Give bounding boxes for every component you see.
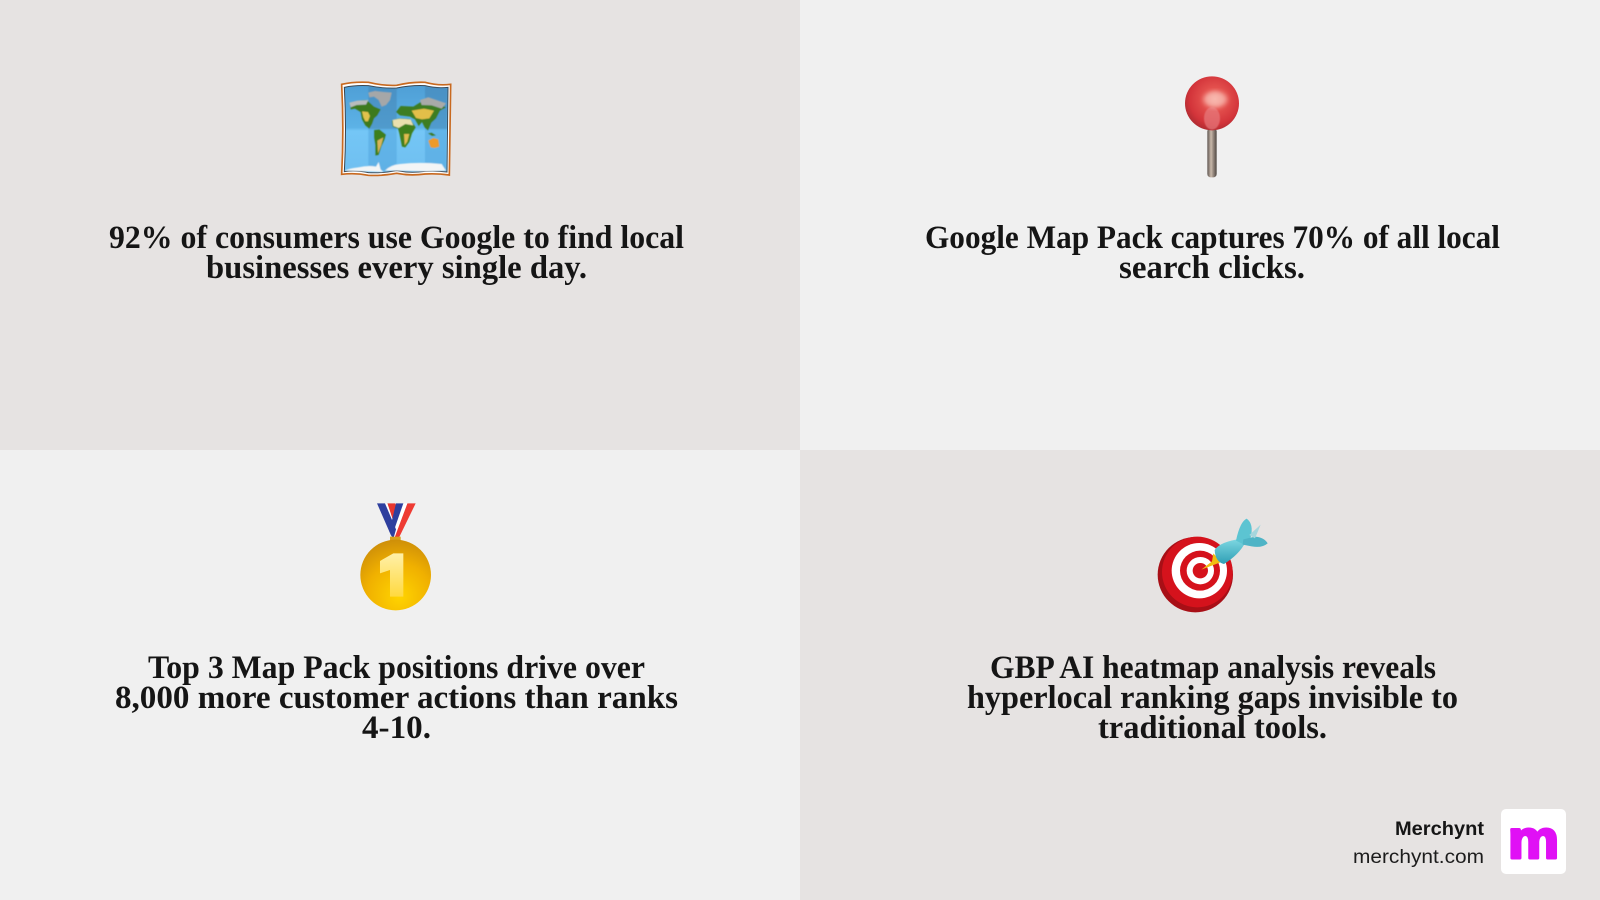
logo xyxy=(1501,809,1566,874)
heading: stat 3 xyxy=(115,650,678,746)
logo: m xyxy=(1508,810,1559,870)
heading: stat 1: 92% of consumers use Google to find local xyxy=(109,220,684,256)
heading: stat 2 xyxy=(925,220,1500,286)
icon: red map pin xyxy=(1185,76,1239,177)
panel: top right xyxy=(800,0,1600,450)
heading: stat 3: 8,000 more customer actions than ranks xyxy=(115,680,678,716)
panel: bottom left xyxy=(0,450,800,900)
heading: stat 2: Google Map Pack captures 70% of all local xyxy=(925,220,1500,256)
icon: gold medal xyxy=(360,503,431,610)
heading: stat 1 xyxy=(109,220,684,286)
heading: stat 3: Top 3 Map Pack positions drive over xyxy=(148,650,645,686)
heading: stat 3: 4-10. xyxy=(362,710,431,746)
panel: top left xyxy=(0,0,800,450)
heading: stat 4: GBP AI heatmap analysis reveals xyxy=(990,650,1436,686)
heading: stat 4: traditional tools. xyxy=(1098,710,1327,746)
heading: stat 1: businesses every single day. xyxy=(206,250,587,286)
panel: bottom right xyxy=(800,450,1600,900)
icon: world map xyxy=(342,82,451,175)
brand name: Merchynt xyxy=(1395,819,1485,840)
icon: dartboard with dart xyxy=(1158,519,1268,612)
heading: stat 2: search clicks. xyxy=(1119,250,1305,286)
heading: stat 4: hyperlocal ranking gaps invisible to xyxy=(967,680,1458,716)
brand url: merchynt.com xyxy=(1353,846,1484,868)
heading: stat 4 xyxy=(967,650,1458,746)
